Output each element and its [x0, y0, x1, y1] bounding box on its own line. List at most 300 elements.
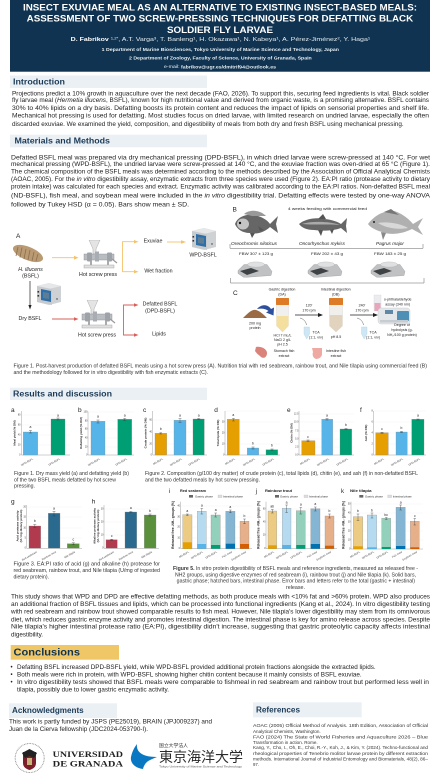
caption: EA:PI charts: Figure 3. EA:PI ratio of acid (g) and alkaline (h) protease for: [14, 561, 160, 567]
figure 1 caption: Figure 1. Post-harvest production of defatted BSFL meals using a hot screw press (A). Nutrition trial with red seabream, rainbow trout, and Nile tilapia using commercial feed (B): [14, 363, 427, 369]
chart b: defatting yield: b: [78, 407, 82, 414]
stomach label: extract: [279, 354, 289, 358]
methods text: mechanical pressing (WPD-BSFL), the undried larvae were screw-pressed at 140 °C, and the exuviae fraction was oven-dried at 65 °C (Figure 1).: [11, 162, 430, 168]
chart f: ash: 4: [371, 432, 373, 434]
chart k: nile tilapia digestibility: b: [371, 508, 373, 512]
chart i: red seabream digestibility: 0: [179, 547, 181, 550]
chart i: red seabream digestibility: [169, 489, 252, 562]
chart f: ash: a: [417, 414, 419, 418]
references text: rheological properties of Tenebrio molitor larvae protein by different extraction: [253, 751, 428, 756]
chart d: total lipids: b: [271, 444, 273, 448]
chart e: chitin: b: [345, 423, 347, 427]
label: first incubation: [302, 304, 316, 312]
chart k: nile tilapia digestibility: 10: [348, 538, 351, 542]
section heading: references: [253, 702, 362, 717]
logo: tokyo university of marine science and technology: 国立大学法人: [159, 742, 188, 749]
chart k: nile tilapia digestibility: 30: [348, 520, 351, 524]
chart a: meal yield: 80: [18, 414, 21, 416]
figure 1 caption: [14, 363, 427, 376]
methods text: (AOAC, 2005). For the in vitro digestibility assay, enzymatic extracts from three species were used (Figure 2). EA:PI ratio (protease activity to dietary: [11, 177, 430, 183]
caption: EA:PI charts: [14, 561, 160, 580]
caption: digestibility charts: gastric phase; hatched bars, intestinal phase. Error bars and letters refer to the total (gastric + intestinal): [177, 579, 415, 585]
species names: Pagrus major: [376, 241, 405, 246]
species names: Oncorhynchus mykiss: [299, 241, 346, 246]
chart e: chitin: 5.0: [295, 438, 299, 440]
chart c: crude protein: a: [198, 414, 200, 418]
chart f: ash: 2: [371, 442, 373, 446]
discussion text: digestibility.: [11, 632, 43, 638]
chart j: rainbow trout digestibility: Fish meal: [306, 550, 318, 559]
icon: plate reader: [378, 308, 410, 324]
sampling tubes and TCA: (1:1, v/v): [309, 335, 323, 339]
caption: composition charts: Figure 2. Composition (g/100 dry matter) of crude protein (c), total lipids (d), chitin (e), and ash (f) in non-defatted BSFL: [145, 471, 418, 477]
conclusions list: Defatting BSFL increased DPD-BSFL yield, while WPD-BSFL provided additional protein fractions alongside the extracted lipids.: [17, 665, 376, 671]
title: SOLDIER FLY LARVAE: [167, 25, 273, 35]
affiliations: 2 Department of Zoology, Faculty of Science, University of Granada, Spain: [129, 56, 312, 60]
sampling tubes and TCA: (1:1, v/v): [366, 335, 380, 339]
species names: [231, 241, 405, 246]
intestine label: Intestine fish: [326, 349, 346, 353]
logo: university of granada: DE GRANADA: [53, 758, 124, 768]
chart k: nile tilapia digestibility: 0: [349, 548, 351, 550]
chart b: defatting yield: DPD-BSFL: [115, 457, 128, 467]
chart k: nile tilapia digestibility: k: [341, 489, 345, 495]
sampling tubes and TCA: TCA: [312, 330, 320, 334]
title: INSECT EXUVIAE MEAL AS AN ALTERNATIVE TO EXISTING INSECT-BASED MEALS:: [23, 2, 417, 12]
body weights: FBW 202 ± 43 g: [311, 251, 343, 256]
gastric conditions: HCl 7 mL/L: [274, 334, 291, 338]
larva label: (BSFL): [22, 274, 39, 280]
chart a: meal yield: 40: [18, 434, 21, 436]
discussion text: This study shows that WPD and DPD are effective defatting methods, as both produce meals with <10% fat and >60% protein. WPD also produces: [11, 594, 430, 600]
powder label: [249, 321, 261, 330]
caption: EA:PI charts: dietary protein).: [14, 574, 49, 580]
conclusions list: •: [10, 680, 13, 686]
conclusions list: •: [10, 665, 13, 671]
label: second incubation: 240': [359, 304, 366, 308]
chart g: acid protease: 0: [25, 546, 27, 550]
label: wet fraction: Wet fraction: [144, 269, 173, 275]
chart j: rainbow trout digestibility: 60: [263, 508, 266, 510]
chart c: crude protein: 60: [149, 418, 153, 422]
introduction text: Mechanical hot pressing is used for defatting. Most studies focus on dried larvae, with limited research on undried larvae, especially the often: [12, 114, 429, 120]
chart f: ash: DPD-BSFL: [408, 457, 421, 467]
conclusions list: tilapia, possibly due to lower gastric enzymatic activity.: [17, 688, 169, 694]
introduction text: fly larvae meal ( Hermetia illucens , BSFL), known for high nutritional value and derived from organic waste, is a promising alternative. BSFL contains: [12, 98, 429, 104]
chart d: total lipids: ND-BSFL: [224, 457, 236, 466]
icon: hot screw press dry: [82, 300, 115, 328]
header banner: [10, 0, 430, 72]
chart i: red seabream digestibility: b: [244, 514, 246, 518]
chart h: alkaline protease: Alkaline protease activity: [92, 508, 96, 544]
arrow: first incubation: [295, 313, 323, 317]
ph label: pH 8.5: [331, 335, 341, 339]
chart d: total lipids: d: [214, 407, 218, 414]
chart j: rainbow trout digestibility: a: [300, 502, 302, 506]
references text: Analytical Chemists, Washington.: [253, 729, 321, 734]
section heading: introduction: [10, 76, 207, 88]
section heading: acknowledgments: [9, 703, 117, 718]
icon: powder: [243, 310, 267, 318]
section heading: results and discussion: Results and discussion: [13, 390, 112, 398]
legend j: Intestinal phase: [309, 494, 328, 498]
chart k: nile tilapia digestibility: 50: [348, 502, 351, 506]
chart j: rainbow trout digestibility: Rainbow trout: [265, 489, 293, 493]
caption: yield charts: of the two BSFL meals defatted by hot screw: [14, 478, 116, 484]
chart k: nile tilapia digestibility: b: [357, 509, 359, 513]
chart f: ash: 0: [371, 454, 373, 456]
introduction text: Projections predict a 10% growth in aquaculture over the next decade (FAO, 2026). To support this, securing feed ingredients is vital. Black soldier: [12, 91, 429, 97]
legend k: [359, 494, 412, 498]
degree of hydrolysis label: [387, 323, 417, 337]
figure 1 panel A: production flow: A: [16, 233, 21, 240]
chart c: crude protein: [143, 407, 207, 467]
chart j: rainbow trout digestibility: Released free -NH₂ groups (%): [256, 501, 260, 549]
icon: larva: [11, 241, 45, 266]
chart c: crude protein: 0: [151, 454, 153, 456]
arrow: larva to dry: [28, 281, 32, 310]
chart d: total lipids: DPD-BSFL: [262, 457, 275, 467]
chart k: nile tilapia digestibility: a: [400, 500, 402, 504]
chart a: meal yield: WPD-BSFL: [20, 457, 34, 467]
chart k: nile tilapia digestibility: bc: [384, 513, 388, 517]
intestinal label: [321, 288, 351, 296]
caption: yield charts: [14, 471, 129, 490]
label: second incubation: [355, 304, 369, 312]
chart j: rainbow trout digestibility: Soybean meal: [315, 550, 332, 562]
affiliations: e-mail: fabrikov@ugr.es/dmitrif94@outlook.es: [164, 64, 277, 69]
conclusions list: •: [10, 673, 13, 679]
chart h: alkaline protease: Nile tilapia: [140, 550, 153, 559]
section heading: introduction: Introduction: [13, 78, 65, 86]
label: defatted BSFL: Defatted BSFL: [143, 301, 177, 307]
conclusions list: In vitro digestibility tests showed that BSFL meals were comparable to fishmeal in red seabream and rainbow trout but performed less well in: [17, 680, 429, 686]
chart i: red seabream digestibility: DPD-BSFL: [205, 550, 218, 560]
affiliations: 1 Department of Marine Biosciences, Tokyo University of Marine Science and Technology, Japan: [102, 47, 339, 52]
chart e: chitin: 2.5: [295, 446, 299, 448]
stomach label: Stomach fish: [274, 349, 294, 353]
chart j: rainbow trout digestibility: 20: [263, 534, 266, 536]
figure 1 panel B: nutrition trial: [230, 206, 424, 283]
chart b: defatting yield: 60: [85, 428, 88, 430]
arrows: dry branch: [124, 303, 138, 337]
chart k: nile tilapia digestibility: Fish meal: [391, 550, 403, 559]
gastric conditions: [274, 334, 291, 346]
logo: tokyo university of marine science and technology: 東京海洋大学: [159, 749, 243, 765]
powder label: 200 mg: [249, 321, 261, 325]
chart g: acid protease: (U / mg dietary protein): [19, 510, 23, 542]
title: [23, 2, 417, 35]
assay label: assay (340 nm): [385, 302, 410, 306]
chart e: chitin: e: [287, 407, 291, 414]
degree of hydrolysis label: Degree of: [394, 323, 410, 327]
chart e: chitin: c: [307, 435, 309, 439]
references text: AOAC (2005) Official Method of Analysis. 18th Edition, Association of Official: [253, 723, 428, 728]
chart j: rainbow trout digestibility: ab: [270, 504, 274, 508]
chart a: meal yield: 60: [18, 424, 21, 426]
chart d: total lipids: 20: [222, 432, 225, 434]
chart k: nile tilapia digestibility: 20: [348, 530, 351, 532]
chart d: total lipids: 30: [222, 420, 225, 424]
chart c: crude protein: a: [179, 414, 181, 418]
label: first incubation: 170 rpm: [302, 308, 316, 312]
label: first incubation: 120': [306, 304, 313, 308]
chart f: ash: Ash (% DM): [364, 425, 368, 441]
chart c: crude protein: WPD-BSFL: [169, 457, 183, 467]
authors: 1,2*: [111, 37, 119, 41]
chart b: defatting yield: 0: [86, 454, 88, 456]
powder label: protein: [250, 326, 260, 330]
icon: oven top: [192, 228, 216, 250]
conclusions list: [10, 665, 429, 694]
degree of hydrolysis label: NH₂/100 g protein): [387, 333, 417, 337]
chart b: defatting yield: Defatting yield (% DM): [79, 417, 83, 449]
chart j: rainbow trout digestibility: j: [255, 489, 257, 495]
label: lipids: Lipids: [152, 332, 166, 338]
title: ASSESSMENT OF TWO SCREW-PRESSING TECHNIQUES FOR DEFATTING BLACK: [27, 14, 414, 24]
gastric label: (DA): [278, 292, 286, 296]
chart a: meal yield: a: [30, 425, 32, 429]
sampling tubes and TCA: TCA: [369, 330, 377, 334]
arrows: wet branch: [122, 240, 138, 273]
references text: Transformation in action. Rome.: [253, 740, 318, 745]
icon: stomach: [255, 347, 267, 358]
chart c: crude protein: 20: [149, 442, 153, 446]
chart k: nile tilapia digestibility: Soybean meal: [401, 550, 418, 562]
acknowledgments text: Juan de la Cierva fellowship (JDC2024-053790-I).: [9, 727, 148, 733]
label: hot screw press dry: Hot screw press: [78, 332, 116, 338]
chart g: acid protease: c: [72, 538, 74, 542]
caption: digestibility charts: [173, 566, 418, 591]
methods text: The chemical composition of the BSFL meals was determined according to the methods described by the Association of Official Analytical Chemists: [11, 170, 430, 176]
stomach label: [274, 349, 294, 358]
chart h: alkaline protease: [92, 498, 159, 562]
conclusions list: Both meals were rich in protein, with WPD-BSFL showing higher chitin content because it mainly consists of BSFL exuviae.: [17, 673, 362, 679]
methods text: (ND-BSFL), fish meal, and soybean meal were included in the in vitro digestibility trial. Defatting effects were tested by one-way ANOVA: [11, 193, 430, 199]
methods text: followed by Tukey HSD (α = 0.05). Bars show mean ± SD.: [11, 202, 189, 208]
degree of hydrolysis label: hydrolysis (g-: [391, 328, 413, 332]
discussion text: diet, which reduces gastric enzyme activity and promotes intestinal digestion. The intestinal phase is key for amino release across species. Despite: [11, 617, 431, 623]
chart a: meal yield: [11, 407, 70, 467]
chart g: acid protease: Acid protease activity: [16, 510, 20, 542]
section heading: materials and methods: [10, 135, 207, 147]
chart f: ash: [360, 407, 426, 467]
chart a: meal yield: Meal yield (% DM): [13, 420, 17, 446]
acknowledgments text: This work is partly funded by JSPS (PE25019), BRAIN (JPJ009237) and: [9, 719, 212, 725]
larva label: H. illucens: [18, 267, 43, 273]
intestinal label: Intestinal digestion: [321, 288, 351, 292]
tube gastric: [276, 298, 289, 332]
chart j: rainbow trout digestibility: [255, 489, 337, 562]
chart g: acid protease: 5: [25, 536, 27, 540]
chart h: alkaline protease: 0: [102, 546, 104, 550]
chart i: red seabream digestibility: 40: [177, 504, 181, 508]
chart e: chitin: 12.5: [294, 412, 299, 416]
chart j: rainbow trout digestibility: 40: [263, 520, 266, 524]
chart i: red seabream digestibility: a: [201, 504, 203, 508]
chart h: alkaline protease: Red seabream: [98, 550, 115, 562]
chart f: ash: 6: [371, 420, 373, 424]
chart h: alkaline protease: b: [149, 509, 151, 513]
icon: oven lower: [37, 283, 61, 305]
caption: composition charts: [145, 471, 418, 484]
chart d: total lipids: [214, 407, 280, 467]
chart e: chitin: [287, 407, 354, 467]
chart k: nile tilapia digestibility: DPD-BSFL: [376, 550, 389, 560]
chart e: chitin: DPD-BSFL: [336, 457, 349, 467]
label: exuviae: Exuviae: [144, 239, 162, 245]
chart k: nile tilapia digestibility: [341, 489, 423, 562]
label: defatted BSFL: [143, 301, 177, 315]
arrow: larva to press: [52, 256, 78, 260]
introduction text: 30% to 40% lipids on a dry basis. Defatting boosts its protein content and reduces the impact of lipids on sensorial properties and shelf life.: [12, 106, 429, 112]
chart h: alkaline protease: h: [92, 498, 96, 506]
chart b: defatting yield: 100: [84, 410, 88, 414]
intestinal label: (DB): [332, 292, 339, 296]
chart j: rainbow trout digestibility: ND-BSFL: [263, 550, 275, 559]
chart i: red seabream digestibility: Released free -NH₂ groups (%): [171, 501, 175, 549]
caption: yield charts: pressing.: [14, 484, 35, 490]
chart f: ash: WPD-BSFL: [390, 457, 404, 467]
figure 1 panel B: nutrition trial: B: [232, 206, 237, 214]
label: second incubation: 170 rpm: [355, 308, 369, 312]
figure 1 caption: and the methodology followed for in vitro digestibility with fish enzymatic extracts (C).: [14, 370, 208, 376]
intestine label: [326, 349, 346, 358]
references text: [253, 723, 429, 767]
section heading: conclusions: Conclusions: [14, 646, 80, 658]
chart i: red seabream digestibility: 20: [177, 526, 181, 528]
section heading: references: References: [256, 706, 301, 714]
chart g: acid protease: Red seabream: [21, 550, 38, 562]
chart i: red seabream digestibility: Fish meal: [221, 550, 233, 559]
chart f: ash: 8: [371, 410, 373, 412]
chart h: alkaline protease: Rainbow trout: [118, 550, 134, 561]
authors: , A.T. Varga³, T. Banleng¹, H. Okazawa¹, N. Kabeya¹, A. Pérez-Jiménez², Y. Haga¹: [118, 37, 370, 43]
methods text: protein intake) was calculated for each species and extract. Enzymatic activity was calibrated according to the EA:PI ratios. Non-defatted BSFL meal: [11, 184, 430, 190]
chart g: acid protease: 10: [23, 526, 27, 530]
chart b: defatting yield: a: [124, 414, 126, 418]
label: WPD-BSFL: WPD-BSFL: [189, 253, 217, 259]
logo: tokyo university of marine science and technology: [131, 742, 243, 769]
legend i: Intestinal phase: [223, 494, 243, 498]
chart a: meal yield: 20: [18, 444, 21, 446]
icon: seabream: [368, 209, 423, 240]
chart j: rainbow trout digestibility: DPD-BSFL: [290, 550, 303, 560]
icon: tilapia: [235, 211, 278, 238]
gastric conditions: NaCl 2 g/L: [274, 338, 291, 342]
label: dry BSFL: Dry BSFL: [19, 316, 42, 322]
section heading: results and discussion: [10, 388, 207, 400]
chart k: nile tilapia digestibility: ND-BSFL: [349, 550, 361, 559]
chart i: red seabream digestibility: 10: [177, 536, 181, 540]
chart c: crude protein: b: [160, 427, 162, 431]
acknowledgments text: [9, 719, 212, 733]
discussion text: Nile tilapia's higher intestinal protease ratio (EA:PI), digestibility didn't increase, suggesting that gastric proteolytic capacity affects intestinal: [11, 625, 430, 631]
chart a: meal yield: a: [57, 414, 59, 418]
chart j: rainbow trout digestibility: a: [286, 500, 288, 504]
chart f: ash: c: [381, 427, 383, 431]
chart j: rainbow trout digestibility: a: [314, 502, 316, 506]
chart d: total lipids: a: [232, 413, 234, 417]
chart g: acid protease: Rainbow trout: [41, 550, 57, 561]
arrow: blue curved: [257, 305, 274, 316]
chart c: crude protein: ND-BSFL: [152, 457, 164, 466]
chart d: total lipids: 10: [222, 442, 225, 446]
intestine label: extract: [331, 354, 341, 358]
chart e: chitin: Chitin (% DM): [290, 423, 294, 443]
chart e: chitin: 7.5: [295, 430, 299, 432]
gastric label: [269, 288, 295, 296]
caption: digestibility charts: Figure 5. In vitro protein digestibility of BSFL meals and reference ingredients, measured as released free -: [173, 566, 418, 572]
references text: methods. International Journal of Industrial Entomology and Biomaterials, 48(2), 86–: [253, 756, 428, 762]
references text: 97.: [253, 762, 259, 767]
section heading: acknowledgments: Acknowledgments: [12, 706, 84, 715]
chart f: ash: f: [360, 407, 362, 414]
chart b: defatting yield: 20: [85, 446, 88, 448]
icon: balances: [238, 262, 405, 278]
chart h: alkaline protease: (U / mg dietary protein): [96, 510, 100, 542]
icon: trout: [299, 214, 347, 236]
chart i: red seabream digestibility: 30: [177, 516, 181, 518]
chart d: total lipids: b: [252, 442, 254, 446]
chart b: defatting yield: a: [97, 414, 99, 418]
gastric label: Gastric digestion: [269, 288, 295, 292]
discussion text: [10, 594, 431, 638]
caption: digestibility charts: release.: [286, 585, 305, 591]
chart j: rainbow trout digestibility: b: [329, 509, 331, 513]
chart c: crude protein: c: [143, 407, 147, 414]
tube intestinal: [329, 298, 343, 332]
chart h: alkaline protease: 10: [101, 534, 104, 536]
arrow: dry to press: [52, 317, 78, 321]
discussion text: an additional fraction of BSFL tissues and lipids, which can be processed into functional ingredients (Kang et al., 2024). In vitro digestibility testing: [11, 602, 430, 608]
arrow: second incubation: [350, 313, 378, 317]
chart a: meal yield: DPD-BSFL: [48, 457, 61, 467]
chart i: red seabream digestibility: ND-BSFL: [178, 550, 190, 559]
chart f: ash: b: [401, 426, 403, 430]
chart i: red seabream digestibility: WPD-BSFL: [190, 550, 204, 560]
references text: Kang, Y., Cho, I., Oh, E., Choi, R.-Y., Koh, J., & Kim, Y. (2024). Techno-functional and: [253, 745, 428, 750]
chart c: crude protein: 40: [149, 430, 153, 434]
chart k: nile tilapia digestibility: Nile tilapia: [350, 489, 373, 493]
arrow: exuviae to oven: [167, 240, 186, 244]
legend k: Gastric phase: [365, 494, 383, 498]
chart i: red seabream digestibility: a: [215, 508, 217, 512]
chart g: acid protease: 20: [23, 506, 27, 508]
figure 1 panel C: digestion method: C: [233, 290, 238, 297]
introduction text: [12, 91, 429, 128]
chart h: alkaline protease: a: [130, 506, 132, 510]
section heading: conclusions: [11, 645, 119, 660]
affiliations: [102, 47, 339, 69]
chart d: total lipids: WPD-BSFL: [242, 457, 256, 467]
caption: digestibility charts: NH2 groups, using digestive enzymes of red seabream (i), rainbow trout (j) and Nile tilapia (k). Solid bars,: [175, 572, 416, 578]
chart f: ash: ND-BSFL: [373, 457, 385, 466]
chart k: nile tilapia digestibility: Released free -NH₂ groups (%): [342, 501, 346, 549]
chart i: red seabream digestibility: a: [186, 509, 188, 513]
authors: D. Fabrikov: [71, 37, 111, 43]
chart h: alkaline protease: c: [111, 534, 113, 538]
chart b: defatting yield: [78, 407, 134, 467]
figure 1 panel C: digestion method: [233, 288, 417, 359]
figure 1 panel A: production flow: [11, 228, 217, 338]
caption: composition charts: and the two defatted meals by hot screw pressing.: [145, 478, 260, 484]
chart g: acid protease: 15: [23, 516, 27, 518]
chart b: defatting yield: WPD-BSFL: [87, 457, 101, 467]
chart g: acid protease: Nile tilapia: [63, 550, 76, 559]
chart c: crude protein: DPD-BSFL: [188, 457, 201, 467]
legend i: [189, 494, 243, 498]
